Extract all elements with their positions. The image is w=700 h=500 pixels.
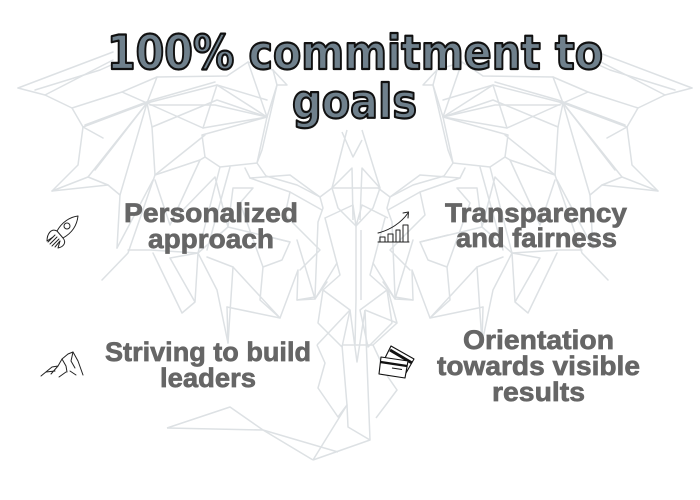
background: polygonal dragon outline — [18, 52, 692, 460]
label: striving to build leaders: leaders — [160, 363, 256, 393]
title: goals — [292, 75, 417, 130]
label: transparency and fairness — [445, 198, 627, 253]
label: transparency and fairness: Transparency — [445, 198, 627, 228]
icon: rocket — [47, 216, 78, 248]
label: orientation towards visible results: towards visible — [437, 351, 640, 381]
title — [107, 26, 603, 130]
label: orientation towards visible results: results — [492, 377, 585, 407]
label: striving to build leaders: Striving to build — [105, 337, 311, 367]
label: personalized approach: Personalized — [124, 198, 298, 228]
label: striving to build leaders — [105, 337, 311, 393]
label: orientation towards visible results: Orientation — [463, 325, 614, 355]
label: orientation towards visible results — [437, 325, 640, 407]
label: transparency and fairness: and fairness — [456, 223, 617, 253]
label: personalized approach — [124, 198, 298, 254]
label: personalized approach: approach — [148, 224, 274, 254]
icon: bank cards — [379, 346, 414, 378]
icon: rising bar chart — [378, 212, 409, 242]
icon: mountain — [41, 352, 83, 377]
title: 100% commitment to — [107, 26, 603, 81]
